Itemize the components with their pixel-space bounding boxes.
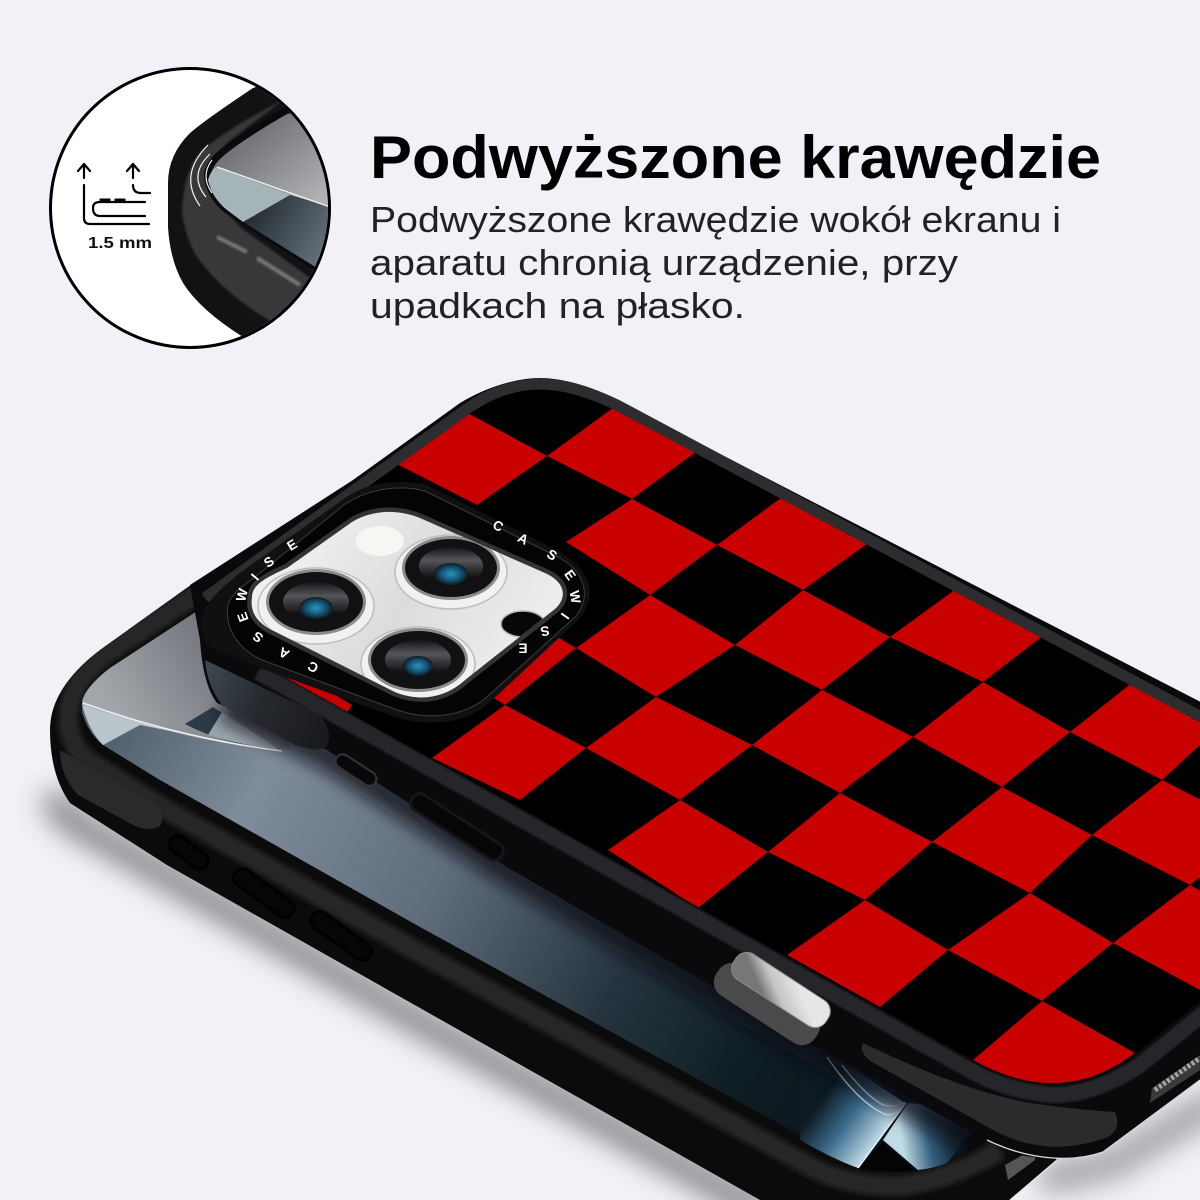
inner window bevel bbox=[252, 512, 563, 697]
side highlights bbox=[217, 237, 300, 285]
dark screen bbox=[243, 195, 328, 267]
1.5 mm label: 1.5 mm bbox=[88, 235, 152, 252]
case outer shape bbox=[168, 87, 328, 336]
CASEWISE ring text: W bbox=[233, 587, 251, 603]
drop shadow under phones bbox=[50, 795, 1200, 1200]
screen bottom wallpaper bbox=[800, 1057, 972, 1172]
CASEWISE ring text: E bbox=[518, 640, 528, 656]
charging port bbox=[708, 947, 835, 1051]
description text: aparatu chronią urządzenie, przy bbox=[370, 242, 958, 283]
back phone screen bbox=[82, 570, 968, 1173]
wallpaper dark notch bbox=[185, 707, 280, 750]
front phone bbox=[190, 378, 1200, 1159]
side switch bbox=[333, 752, 379, 788]
CASEWISE ring text: A bbox=[515, 530, 531, 548]
silver edge line bbox=[987, 1080, 1200, 1158]
white edge line bbox=[217, 167, 330, 207]
back case rim highlight bbox=[68, 565, 1000, 1186]
right light fan bbox=[883, 1103, 972, 1170]
raised camera rim bbox=[201, 482, 590, 723]
front case corner patch bottom bbox=[862, 1043, 1117, 1147]
CASEWISE ring text: C bbox=[305, 658, 321, 676]
wallpaper top gray bbox=[82, 570, 290, 750]
description text: Podwyższone krawędzie wokół ekranu i bbox=[370, 199, 1061, 240]
lens left bbox=[258, 568, 374, 644]
artwork: red and black checker pattern bbox=[208, 390, 1200, 1083]
white diagonal line bbox=[858, 1103, 906, 1168]
back phone bbox=[50, 565, 1057, 1200]
black triangle bbox=[858, 1142, 917, 1172]
CASEWISE ring text: A bbox=[276, 644, 292, 662]
pale wedge bbox=[208, 167, 290, 222]
CASEWISE ring text: I bbox=[558, 610, 572, 622]
flash bbox=[356, 526, 404, 556]
CASEWISE ring text: E bbox=[284, 536, 300, 554]
CASEWISE ring text: S bbox=[544, 546, 560, 564]
CASEWISE ring text: S bbox=[261, 553, 277, 571]
volume buttons back phone bbox=[166, 833, 375, 964]
CASEWISE ring text: E bbox=[561, 567, 579, 583]
gray side band bbox=[182, 100, 320, 322]
CASEWISE ring text: E bbox=[234, 610, 252, 624]
side button bbox=[408, 791, 506, 863]
thin ring outline bbox=[227, 488, 584, 716]
CASEWISE ring text: I bbox=[248, 571, 262, 583]
heading: Podwyższone krawędzie bbox=[370, 124, 1101, 191]
gray screen bbox=[207, 110, 340, 270]
microphone hole bbox=[501, 611, 545, 637]
wallpaper pale wedge bbox=[82, 704, 285, 751]
camera glass panel bbox=[252, 512, 563, 698]
white curved marks bbox=[191, 145, 212, 206]
shadow on back screen bbox=[225, 705, 967, 1135]
CASEWISE ring text: C bbox=[490, 517, 506, 535]
speaker grille bbox=[1150, 1055, 1200, 1103]
back phone port bbox=[1005, 1148, 1035, 1180]
front case corner patch near camera bbox=[205, 660, 329, 749]
CASEWISE ring text bbox=[233, 517, 584, 676]
back case corner patch bbox=[60, 750, 162, 829]
description text: upadkach na płasko. bbox=[370, 285, 745, 326]
zoomed case corner bbox=[168, 87, 328, 336]
left light fan bbox=[800, 1060, 905, 1168]
lower side rim band bbox=[258, 672, 1200, 1095]
back case body bbox=[50, 582, 1057, 1200]
wallpaper curve bbox=[83, 703, 282, 751]
back phone edge line bbox=[1010, 1160, 1057, 1200]
raised edges inset circle bbox=[50, 60, 340, 348]
CASEWISE ring text: S bbox=[250, 628, 266, 646]
lens bottom bbox=[361, 627, 475, 701]
CASEWISE ring text: S bbox=[539, 623, 551, 639]
lens top bbox=[395, 535, 507, 609]
front case top rim bbox=[205, 384, 1200, 727]
description text bbox=[370, 199, 1061, 326]
raised edge icon bbox=[78, 164, 150, 224]
CASEWISE ring text: W bbox=[567, 589, 584, 605]
light arcs bbox=[827, 1057, 905, 1115]
front case body bbox=[190, 378, 1200, 1158]
camera module bbox=[201, 482, 590, 723]
